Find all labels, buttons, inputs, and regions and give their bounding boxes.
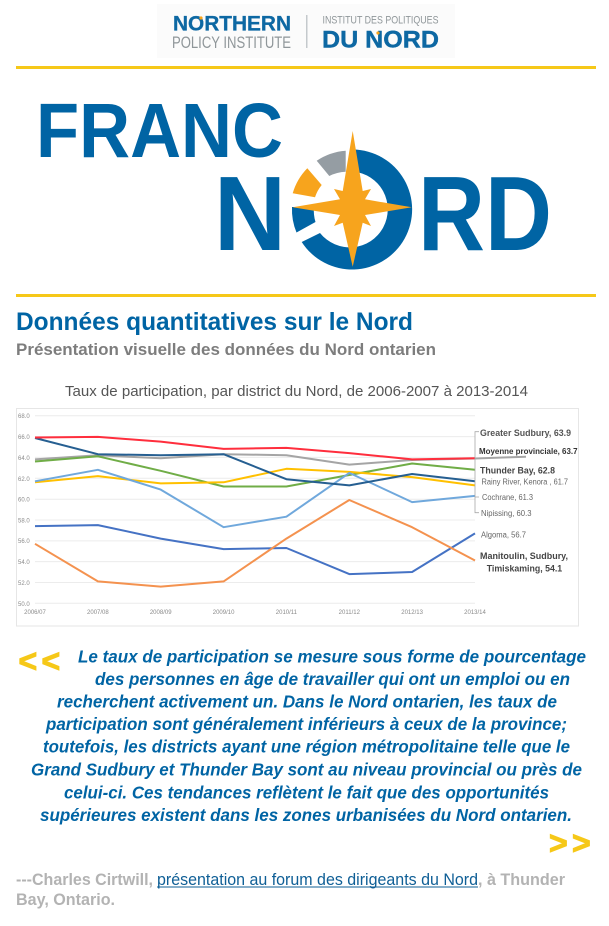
y axis labels: 58.0 <box>18 518 30 524</box>
chart title: Taux de participation, par district du Nord, de 2006-2007 à 2013-2014 <box>65 384 528 400</box>
series labels: Manitoulin, Sudbury, <box>480 551 568 562</box>
y axis labels <box>18 414 30 608</box>
x axis labels: 2006/07 <box>24 610 46 616</box>
y axis labels: 64.0 <box>18 456 30 462</box>
attribution: ---Charles Cirtwill, <box>16 870 153 889</box>
icon: compass star <box>293 131 412 267</box>
y axis labels: 66.0 <box>18 435 30 441</box>
closing quote mark: >> <box>549 825 591 861</box>
y axis labels: 62.0 <box>18 477 30 483</box>
series labels <box>479 428 578 574</box>
icon: compass ring <box>292 150 412 269</box>
line chart <box>16 408 578 626</box>
series labels: Greater Sudbury, 63.9 <box>480 428 571 439</box>
wordmark: RD: RD <box>418 155 552 273</box>
opening quote mark: << <box>18 643 60 679</box>
Northern Policy Institute logo: DU NORD <box>322 26 439 53</box>
Northern Policy Institute logo: POLICY INSTITUTE <box>172 34 291 52</box>
x axis labels: 2012/13 <box>401 610 424 616</box>
subheading: Présentation visuelle des données du Nord ontarien <box>16 340 436 359</box>
x axis labels: 2008/09 <box>150 610 172 616</box>
series labels: Nipissing, 60.3 <box>481 509 532 518</box>
x axis labels: 2013/14 <box>464 610 486 616</box>
quote text: celui-ci. Ces tendances reflètent le fait que des opportunités <box>64 782 549 802</box>
Franc Nord logo <box>36 88 552 273</box>
y axis labels: 56.0 <box>18 539 30 545</box>
heading: Données quantitatives sur le Nord <box>16 308 413 336</box>
wordmark: N: N <box>214 155 286 273</box>
y axis labels: 60.0 <box>18 498 30 504</box>
y axis labels: 68.0 <box>18 414 30 420</box>
wordmark: FRANC: FRANC <box>36 88 283 174</box>
quote text: supérieures existent dans les zones urbanisées du Nord ontarien. <box>40 805 572 825</box>
top yellow rule <box>16 66 596 69</box>
attribution: , à Thunder <box>478 870 565 889</box>
x axis labels: 2011/12 <box>339 610 361 616</box>
series labels: Rainy River, Kenora , 61.7 <box>482 478 568 486</box>
quote text: Le taux de participation se mesure sous forme de pourcentage <box>78 646 586 666</box>
data lines <box>35 437 526 587</box>
x axis labels: 2010/11 <box>276 610 298 616</box>
quote text: participation sont généralement inférieurs à ceux de la province; <box>45 714 567 734</box>
bottom yellow rule <box>16 294 596 297</box>
series labels: Timiskaming, 54.1 <box>487 563 563 574</box>
Northern Policy Institute logo <box>157 4 455 58</box>
attribution: présentation au forum des dirigeants du Nord <box>157 870 478 889</box>
quote text <box>31 646 586 825</box>
x axis labels <box>24 610 486 616</box>
Northern Policy Institute logo: INSTITUT DES POLITIQUES <box>322 14 438 26</box>
quote text: toutefois, les districts ayant une région métropolitaine telle que le <box>43 736 570 756</box>
series labels: Algoma, 56.7 <box>481 530 526 539</box>
series labels: Thunder Bay, 62.8 <box>480 466 556 476</box>
series labels: Cochrane, 61.3 <box>482 493 533 502</box>
quote text: des personnes en âge de travailler qui ont un emploi ou en <box>95 669 570 689</box>
y axis labels: 54.0 <box>18 560 30 566</box>
series labels: Moyenne provinciale, 63.7 <box>479 446 578 456</box>
quote text: Grand Sudbury et Thunder Bay sont au niveau provincial ou près de <box>31 760 582 780</box>
bracket <box>475 432 479 513</box>
x axis labels: 2009/10 <box>213 610 235 616</box>
attribution: Bay, Ontario. <box>16 890 115 909</box>
Northern Policy Institute logo: NORTHERN <box>173 12 291 36</box>
y axis labels: 52.0 <box>18 581 30 587</box>
attribution <box>16 870 565 909</box>
x axis labels: 2007/08 <box>87 610 109 616</box>
y axis labels: 50.0 <box>18 602 30 608</box>
quote text: recherchent activement un. Dans le Nord ontarien, les taux de <box>57 692 557 712</box>
